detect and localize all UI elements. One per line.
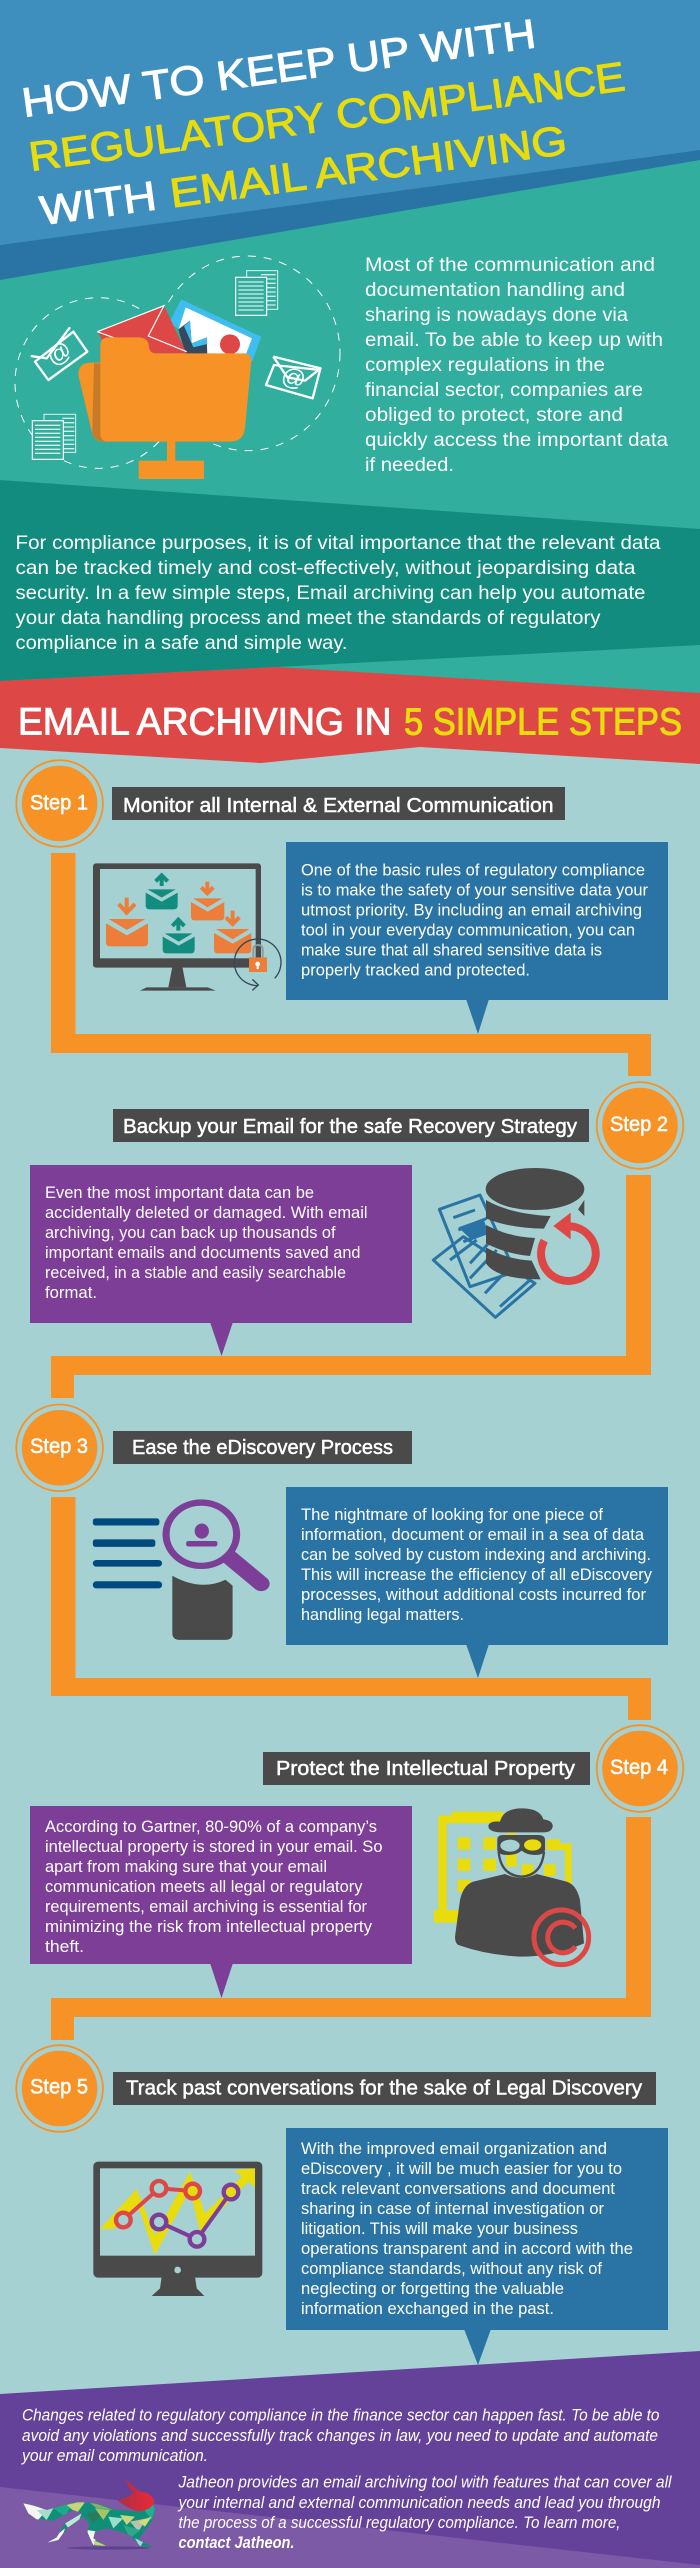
icon: database backup — [433, 1168, 596, 1317]
icon: folder — [78, 337, 251, 479]
callout: step 2 text: archiving, you can back up thousands of — [45, 1224, 336, 1242]
panel: compliance purposes: compliance in a safe and simple way. — [16, 632, 348, 654]
connector 4 to 5 — [51, 1817, 651, 2040]
callout: step 5 text: information exchanged in the past. — [301, 2300, 554, 2318]
intro text: Most of the communication and — [365, 254, 655, 276]
callout: step 4 text: theft. — [45, 1938, 84, 1956]
icon: orange envelope top right — [191, 898, 224, 920]
documents — [433, 1195, 535, 1317]
intro text: sharing is nowadays done via — [365, 304, 628, 326]
panel: compliance purposes: security. In a few simple steps, Email archiving can help you automate — [16, 582, 646, 604]
Jatheon text: contact Jatheon. — [178, 2533, 294, 2552]
step 5 — [16, 2045, 668, 2365]
Jatheon text — [178, 2472, 673, 2552]
illustration: folder with emails and documents — [15, 256, 340, 479]
callout: step 4 text: apart from making sure that your email — [45, 1858, 327, 1876]
callout: step 3 text: The nightmare of looking for one piece of — [301, 1506, 603, 1524]
callout: step 4 text: requirements, email archiving is essential for — [45, 1898, 367, 1916]
step 2 badge: Step 2 — [610, 1113, 668, 1136]
callout: step 1 text: tool in your everyday communication, you can — [301, 922, 635, 940]
title: EMAIL ARCHIVING — [167, 117, 570, 216]
callout: step 1 text: utmost priority. By including an email archiving — [301, 902, 642, 920]
step 1 badge — [16, 760, 103, 847]
icon: email right — [266, 357, 321, 398]
step 5 heading: Track past conversations for the sake of Legal Discovery — [126, 2076, 643, 2100]
panel: compliance purposes: For compliance purposes, it is of vital importance that the relevant data — [16, 532, 661, 554]
connector 2 to 3 — [51, 1175, 651, 1398]
callout: step 1 text: make sure that all shared sensitive data is — [301, 942, 602, 960]
intro text: if needed. — [365, 454, 454, 476]
callout: step 5 text: litigation. This will make your business — [301, 2220, 578, 2238]
step 1 — [16, 760, 668, 1034]
icon: email left: @ — [42, 336, 77, 372]
callout: step 5 text: With the improved email organization and — [301, 2140, 607, 2158]
step 5 heading — [113, 2072, 656, 2105]
icon: Jatheon fox logo — [20, 2478, 160, 2550]
step 1 heading — [112, 787, 565, 820]
step 3 heading: Ease the eDiscovery Process — [132, 1436, 393, 1459]
callout: step 1 text: One of the basic rules of regulatory compliance — [301, 862, 645, 880]
intro text — [365, 254, 668, 476]
red data line — [116, 2181, 200, 2227]
closing text — [21, 2406, 659, 2465]
intro text: complex regulations in the — [365, 354, 605, 376]
intro text: quickly access the important data — [365, 429, 668, 451]
callout: step 1 text: properly tracked and protected. — [301, 962, 530, 980]
step 4 heading — [263, 1752, 590, 1785]
Jatheon text: the process of a successful regulatory compliance. To learn more, — [178, 2513, 620, 2532]
callout: step 2 text: received, in a stable and easily searchable — [45, 1264, 346, 1282]
callout: step 4 text: minimizing the risk from intellectual property — [45, 1918, 373, 1936]
icon: document stack top right — [236, 271, 278, 315]
icon: red envelope — [97, 306, 187, 353]
icon: teal envelope top — [146, 889, 178, 909]
callout: step 5 text: neglecting or forgetting the valuable — [301, 2280, 564, 2298]
intro text: obliged to protect, store and — [365, 404, 623, 426]
banner: 5 simple steps — [0, 667, 700, 764]
intro text: financial sector, companies are — [365, 379, 643, 401]
title — [19, 10, 628, 234]
banner: 5 simple steps: EMAIL ARCHIVING IN — [18, 702, 392, 744]
callout: step 3 text: This will increase the efficiency of all eDiscovery — [301, 1566, 653, 1584]
panel: compliance purposes: can be tracked timely and cost-effectively, without jeopardising data — [16, 557, 636, 579]
callout: step 3 text: information, document or email in a sea of data — [301, 1526, 645, 1544]
icon: email left — [31, 327, 87, 380]
recovery arrow — [541, 1213, 596, 1281]
step 2 badge — [597, 1082, 683, 1169]
callout: step 5 text: sharing in case of internal investigation or — [301, 2200, 605, 2218]
panel: compliance purposes: your data handling process and meet the standards of regulatory — [16, 607, 601, 629]
building — [434, 1812, 572, 1923]
icon: teal envelope bottom — [163, 933, 195, 953]
intro text: documentation handling and — [365, 279, 625, 301]
step 4 — [30, 1725, 683, 1998]
icon: padlock and circular arrow — [234, 939, 281, 990]
step 1 heading: Monitor all Internal & External Communication — [123, 794, 554, 817]
yellow trend arrow — [100, 2168, 255, 2255]
callout: step 3 text: can be solved by custom indexing and archiving. — [301, 1546, 651, 1564]
thief figure — [455, 1808, 584, 1957]
callout: step 5 text: eDiscovery , it will be much easier for you to — [301, 2160, 622, 2178]
icon: monitor with emails and lock — [93, 863, 281, 991]
callout: step 2 text: format. — [45, 1284, 97, 1302]
icon: thief with copyright — [434, 1808, 589, 1965]
icon: monitor with chart — [93, 2162, 262, 2296]
step 4 badge: Step 4 — [610, 1756, 668, 1779]
icon: magnifier and list — [93, 1503, 261, 1640]
panel: compliance purposes — [0, 480, 700, 681]
purple data line — [152, 2185, 238, 2247]
callout: step 3 text: handling legal matters. — [301, 1606, 464, 1624]
title: WITH — [37, 173, 159, 234]
title: HOW TO KEEP UP WITH — [19, 10, 538, 126]
callout: step 2 text: Even the most important data can be — [45, 1184, 314, 1202]
connector 3 to 4 — [51, 1497, 651, 1720]
callout: step 2 text: accidentally deleted or damaged. With email — [45, 1204, 368, 1222]
callout: step 5 text: track relevant conversations and document — [301, 2180, 615, 2198]
header band — [0, 0, 700, 280]
step 5 badge — [16, 2045, 103, 2132]
step 3 badge: Step 3 — [30, 1435, 88, 1458]
callout: step 1 text — [286, 842, 668, 1034]
callout: step 5 text — [286, 2128, 668, 2365]
callout: step 3 text — [286, 1487, 668, 1678]
step 5 badge: Step 5 — [30, 2076, 88, 2098]
icon: big envelope — [106, 919, 148, 946]
step 3 — [16, 1404, 668, 1678]
intro text: email. To be able to keep up with — [365, 329, 663, 351]
icon: document stack bottom left — [32, 414, 76, 459]
connector 1 to 2 — [51, 853, 651, 1076]
callout: step 5 text: operations transparent and in accord with the — [301, 2240, 633, 2258]
icon: photo card — [170, 301, 260, 360]
icon: orange envelope right — [214, 929, 251, 953]
arrows on screen — [119, 875, 239, 931]
callout: step 1 text: is to make the safety of your sensitive data your — [301, 882, 648, 900]
step 1 badge: Step 1 — [30, 792, 88, 814]
step 2 heading: Backup your Email for the safe Recovery Strategy — [123, 1115, 578, 1138]
icon: email right: @ — [278, 362, 309, 394]
step 3 badge — [16, 1404, 103, 1491]
callout: step 4 text: intellectual property is stored in your email. So — [45, 1838, 382, 1856]
Jatheon text: your internal and external communication needs and lead you through — [178, 2493, 660, 2512]
callout: step 4 text — [30, 1806, 412, 1998]
callout: step 2 text: important emails and documents saved and — [45, 1244, 360, 1262]
callout: step 3 text: processes, without additional costs incurred for — [301, 1586, 646, 1604]
callout: step 4 text: communication meets all legal or regulatory — [45, 1878, 363, 1896]
database cylinder — [486, 1168, 584, 1279]
callout: step 4 text: According to Gartner, 80-90% of a company’s — [45, 1818, 377, 1836]
step 3 heading — [113, 1431, 412, 1464]
step 2 heading — [113, 1109, 589, 1142]
callout: step 2 text — [30, 1165, 412, 1356]
callout: step 5 text: compliance standards, without any risk of — [301, 2260, 602, 2278]
title: REGULATORY COMPLIANCE — [26, 53, 628, 180]
step 2 — [30, 1082, 683, 1356]
step 4 heading: Protect the Intellectual Property — [276, 1757, 576, 1780]
copyright symbol — [534, 1910, 589, 1965]
footer panel — [0, 2351, 700, 2568]
closing text: your email communication. — [21, 2446, 208, 2465]
step 4 badge — [597, 1725, 683, 1812]
